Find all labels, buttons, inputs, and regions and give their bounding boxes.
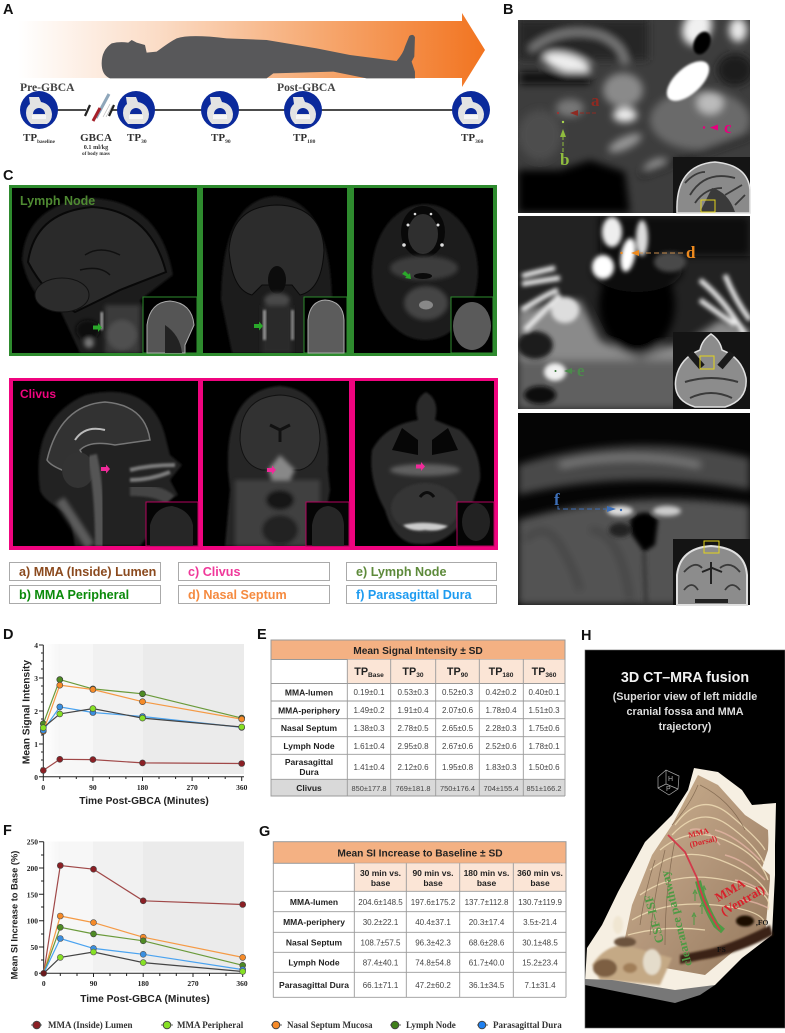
table rows: 850±177.8 bbox=[352, 784, 386, 793]
legend MMA peripheral: MMA Peripheral bbox=[177, 1020, 244, 1030]
table column headers: 360 min vs. bbox=[517, 868, 563, 878]
orange gradient arrow bbox=[18, 13, 485, 87]
table column headers: TP bbox=[532, 666, 545, 678]
white fold bbox=[762, 840, 770, 875]
table rows: 0.53±0.3 bbox=[397, 688, 429, 697]
table rows: 30.2±22.1 bbox=[363, 918, 399, 927]
x tick labels: 180 bbox=[138, 979, 149, 988]
table grid bbox=[273, 842, 566, 997]
table column headers: base bbox=[371, 878, 390, 888]
clivus row shade bbox=[271, 779, 565, 796]
label TP180: 180 bbox=[307, 139, 316, 145]
label MMA ventral: (Ventral) bbox=[718, 882, 767, 919]
MRI axial ROI d e bbox=[517, 216, 750, 409]
y tick labels: 150 bbox=[27, 890, 38, 900]
table rows: 30.1±48.5 bbox=[522, 938, 558, 948]
panel letter H: H bbox=[581, 628, 591, 644]
inset clivus sagittal bbox=[146, 502, 198, 546]
inset coronal brain bbox=[673, 539, 750, 605]
legend box e: e) Lymph Node bbox=[356, 565, 446, 579]
panel F: SI increase chart bbox=[3, 823, 248, 1005]
table rows: 0.42±0.2 bbox=[485, 688, 517, 697]
label c bbox=[703, 118, 732, 137]
legend box f bbox=[346, 586, 496, 604]
table rows: MMA-periphery bbox=[283, 917, 345, 927]
table column headers: base bbox=[530, 878, 550, 888]
table rows: 47.2±60.2 bbox=[415, 981, 451, 990]
legend box d: d) Nasal Septum bbox=[188, 588, 287, 602]
table rows: Clivus bbox=[296, 783, 322, 793]
y tick labels bbox=[27, 838, 38, 978]
panel A: study timeline bbox=[3, 2, 490, 157]
heading Post-GBCA: Post-GBCA bbox=[277, 81, 336, 94]
panel letter D: D bbox=[3, 627, 13, 643]
table rows: 1.95±0.8 bbox=[442, 763, 474, 772]
chart axes bbox=[39, 645, 244, 781]
x tick labels: 0 bbox=[42, 979, 46, 988]
table rows: 68.6±28.6 bbox=[469, 938, 505, 948]
label TP180: TP bbox=[293, 132, 307, 144]
arrow lymph coronal bbox=[254, 322, 263, 330]
panel letter A: A bbox=[3, 2, 14, 18]
heading Pre-GBCA: Pre-GBCA bbox=[20, 81, 75, 94]
arrow clivus axial bbox=[416, 462, 425, 471]
black background bbox=[585, 650, 785, 1028]
table rows: 74.8±54.8 bbox=[415, 958, 451, 968]
legend box c bbox=[178, 562, 330, 580]
panel D: mean signal intensity chart bbox=[3, 627, 248, 807]
panel C: lymph node and clivus MRI bbox=[3, 168, 498, 604]
inset clivus coronal bbox=[306, 502, 349, 546]
legend box d bbox=[178, 586, 330, 604]
subheading: trajectory) bbox=[659, 721, 712, 733]
table column headers: TP bbox=[354, 666, 368, 678]
table rows: 1.49±0.2 bbox=[353, 706, 385, 715]
x tick labels: 0 bbox=[41, 783, 45, 792]
label f bbox=[554, 490, 622, 512]
icon: orientation cube: H bbox=[668, 776, 673, 783]
series parasagittal dura bbox=[44, 936, 246, 973]
y tick labels bbox=[34, 641, 38, 782]
table rows: 36.1±34.5 bbox=[469, 981, 505, 990]
table column headers: 180 min vs. bbox=[464, 868, 509, 878]
panel letter C: C bbox=[3, 168, 14, 184]
series nasal septum bbox=[44, 913, 246, 973]
table column headers: 180 bbox=[502, 672, 514, 679]
table rows: 1.78±0.4 bbox=[485, 706, 517, 715]
table header: Mean SI Increase to Baseline ± SD bbox=[337, 848, 503, 860]
icon: MRI scanner 180 bbox=[284, 91, 322, 129]
x tick labels: 270 bbox=[187, 979, 199, 988]
panel letter G: G bbox=[259, 824, 270, 840]
inset lymph axial bbox=[451, 297, 493, 353]
axis title y: Mean Signal Intensity bbox=[22, 660, 32, 764]
label TP360: TP bbox=[461, 132, 475, 144]
label a bbox=[557, 91, 600, 116]
arrow clivus sagittal bbox=[101, 464, 110, 474]
table rows: Nasal Septum bbox=[286, 938, 343, 948]
label clearance pathway: clearance pathway bbox=[657, 868, 695, 968]
legend box e bbox=[346, 562, 496, 580]
label GBCA dose: of body mass bbox=[82, 152, 110, 157]
table rows: 2.52±0.6 bbox=[485, 742, 517, 751]
table rows: 1.41±0.4 bbox=[353, 763, 385, 772]
label TP baseline: baseline bbox=[37, 139, 56, 145]
series MMA peripheral bbox=[40, 706, 245, 731]
table rows: Nasal Septum bbox=[281, 723, 338, 733]
label e bbox=[554, 361, 585, 380]
table column headers: base bbox=[477, 878, 496, 888]
label TP30: 30 bbox=[141, 139, 147, 145]
table rows: 2.28±0.3 bbox=[485, 724, 517, 733]
table rows: MMA-lumen bbox=[290, 897, 338, 907]
inset lymph coronal bbox=[304, 297, 347, 353]
label TP90: TP bbox=[211, 132, 225, 144]
inset axial brain bbox=[673, 332, 750, 409]
inset clivus axial bbox=[457, 502, 494, 546]
axis title y: Mean SI Increase to Base (%) bbox=[10, 851, 20, 979]
label Clivus: Clivus bbox=[20, 387, 56, 401]
table rows: 1.50±0.6 bbox=[528, 763, 560, 772]
table rows: 2.78±0.5 bbox=[397, 724, 429, 733]
table rows: 20.3±17.4 bbox=[469, 918, 505, 927]
chart legend bbox=[31, 1020, 562, 1030]
CSF pathway band bbox=[698, 881, 723, 931]
label MMA dorsal: (Dorsal) bbox=[689, 834, 718, 849]
icon: MRI scanner 30 bbox=[117, 91, 155, 129]
table rows: 1.78±0.1 bbox=[528, 742, 560, 751]
series lymph node bbox=[40, 677, 245, 727]
legend nasal septum mucosa: Nasal Septum Mucosa bbox=[287, 1020, 373, 1030]
legend MMA lumen: MMA (Inside) Lumen bbox=[48, 1020, 133, 1030]
y tick labels: 4 bbox=[34, 641, 38, 650]
table rows: 2.95±0.8 bbox=[397, 742, 429, 751]
icon: MRI scanner baseline bbox=[20, 91, 58, 129]
table column headers: TP bbox=[402, 666, 416, 678]
table column headers: 360 bbox=[545, 672, 557, 679]
table rows: 40.4±37.1 bbox=[415, 918, 451, 927]
table rows: 130.7±119.9 bbox=[518, 898, 562, 907]
x tick labels: 360 bbox=[236, 979, 248, 988]
label GBCA dose: GBCA bbox=[80, 132, 112, 144]
chart axes bbox=[39, 842, 245, 977]
x tick labels: 360 bbox=[236, 783, 248, 792]
label c: c bbox=[724, 118, 732, 137]
table rows: 1.75±0.6 bbox=[528, 724, 560, 733]
MMA vessel bbox=[668, 835, 720, 930]
skull fossa 3D model bbox=[585, 768, 776, 1003]
table header bbox=[273, 842, 566, 863]
y tick labels: 0 bbox=[34, 969, 38, 978]
subheading: (Superior view of left middle bbox=[613, 691, 757, 703]
table rows: 1.91±0.4 bbox=[397, 706, 429, 715]
label f: f bbox=[554, 490, 560, 509]
table rows: 1.38±0.3 bbox=[353, 724, 385, 733]
label TP90: 90 bbox=[225, 139, 231, 145]
x tick labels: 270 bbox=[186, 783, 198, 792]
panel H: 3D CT-MRA fusion bbox=[581, 628, 785, 1028]
legend box b bbox=[10, 586, 160, 604]
label MMA dorsal: MMA bbox=[687, 826, 710, 840]
MRI clivus axial bbox=[355, 381, 494, 546]
x tick labels bbox=[42, 979, 248, 988]
label TP baseline: TP bbox=[23, 132, 37, 144]
icon: patient silhouette bbox=[102, 35, 415, 78]
label FO: ,FO bbox=[756, 918, 768, 927]
icon: MRI scanner 360 bbox=[452, 91, 490, 129]
table rows: 7.1±31.4 bbox=[524, 981, 556, 990]
subheading: cranial fossa and MMA bbox=[626, 706, 744, 718]
icon: orientation cube: P bbox=[666, 786, 671, 793]
inset lymph sagittal bbox=[143, 297, 197, 353]
table rows: Parasagittal bbox=[285, 757, 333, 767]
y tick labels: 50 bbox=[30, 943, 38, 952]
table rows: Lymph Node bbox=[288, 958, 340, 968]
y tick labels: 2 bbox=[34, 707, 38, 716]
table column headers: TP bbox=[489, 666, 502, 678]
panel E: signal intensity table bbox=[257, 627, 565, 796]
chart bands bbox=[44, 842, 244, 972]
table rows: 108.7±57.5 bbox=[361, 938, 401, 948]
table column headers bbox=[354, 863, 566, 891]
y tick labels: 200 bbox=[27, 864, 38, 873]
label TP30: TP bbox=[127, 132, 141, 144]
table rows: Dura bbox=[299, 767, 319, 777]
arrow lymph axial bbox=[402, 271, 411, 279]
axis title x: Time Post-GBCA (Minutes) bbox=[80, 994, 210, 1005]
MRI clivus sagittal bbox=[13, 381, 198, 546]
series lymph node bbox=[44, 924, 246, 973]
table rows: Parasagittal Dura bbox=[279, 980, 349, 990]
table rows: MMA-periphery bbox=[278, 706, 340, 716]
label CSF-ISF: CSF–ISF bbox=[641, 893, 667, 945]
arrow lymph sagittal bbox=[93, 323, 102, 332]
table rows: 87.4±40.1 bbox=[363, 958, 399, 968]
MRI lymph coronal bbox=[203, 188, 347, 353]
label e: e bbox=[577, 361, 585, 380]
table rows: 61.7±40.0 bbox=[469, 958, 505, 968]
MRI coronal ROI f bbox=[518, 413, 750, 605]
x tick labels: 90 bbox=[90, 979, 98, 988]
legend lymph node: Lymph Node bbox=[406, 1020, 456, 1030]
panel G: SI increase table bbox=[259, 824, 566, 997]
table rows: MMA-lumen bbox=[285, 688, 333, 698]
foramen dark groove bbox=[680, 925, 773, 964]
label b bbox=[560, 121, 569, 169]
label Lymph Node: Lymph Node bbox=[20, 194, 95, 208]
MRI sagittal ROI a b c bbox=[518, 6, 753, 213]
label a: a bbox=[591, 91, 600, 110]
table rows: 96.3±42.3 bbox=[415, 938, 451, 948]
table grid bbox=[271, 640, 565, 796]
legend box a: a) MMA (Inside) Lumen bbox=[19, 565, 156, 579]
y tick labels: 100 bbox=[27, 916, 38, 926]
table rows: Lymph Node bbox=[283, 741, 335, 751]
table rows: 704±155.4 bbox=[484, 784, 518, 793]
table rows: 0.52±0.3 bbox=[442, 688, 474, 697]
label MMA ventral: MMA bbox=[712, 876, 748, 905]
table column headers: 90 bbox=[461, 672, 468, 679]
foramen ovale bbox=[736, 916, 754, 926]
panel letter F: F bbox=[3, 823, 12, 839]
table column headers: 30 bbox=[416, 672, 424, 679]
MRI lymph axial bbox=[354, 188, 493, 353]
table column headers: 90 min vs. bbox=[412, 868, 454, 878]
panel: clivus frame bbox=[9, 378, 498, 550]
y tick labels: 1 bbox=[34, 740, 38, 749]
table rows: 769±181.8 bbox=[396, 784, 430, 793]
x tick labels bbox=[41, 783, 248, 792]
label TP360: 360 bbox=[475, 139, 484, 145]
table rows: 137.7±112.8 bbox=[465, 898, 509, 907]
label d bbox=[620, 243, 696, 262]
table rows: 15.2±23.4 bbox=[522, 958, 558, 968]
table rows: 2.07±0.6 bbox=[442, 706, 474, 715]
panel B: MRI regions of interest bbox=[503, 2, 753, 605]
table rows: 2.65±0.5 bbox=[442, 724, 474, 733]
table rows: 1.61±0.4 bbox=[353, 742, 385, 751]
y tick labels: 250 bbox=[27, 838, 38, 846]
series parasagittal dura bbox=[40, 704, 245, 733]
label b: b bbox=[560, 150, 569, 169]
table rows: 3.5±-21.4 bbox=[523, 918, 557, 927]
legend box c: c) Clivus bbox=[188, 565, 240, 579]
timeline line bbox=[40, 109, 470, 111]
chart bands bbox=[44, 644, 244, 774]
table column headers: base bbox=[423, 878, 443, 888]
legend box b: b) MMA Peripheral bbox=[19, 588, 129, 602]
table rows: 851±166.2 bbox=[527, 784, 561, 793]
series MMA lumen bbox=[44, 862, 246, 973]
MRI lymph sagittal bbox=[12, 188, 197, 353]
table rows bbox=[279, 897, 562, 990]
table rows: 204.6±148.5 bbox=[358, 898, 403, 907]
heading 3D CT-MRA fusion: 3D CT–MRA fusion bbox=[621, 670, 749, 686]
label FS: FS bbox=[717, 945, 726, 954]
table header bbox=[271, 640, 565, 660]
table rows: 2.67±0.6 bbox=[442, 742, 474, 751]
arrow clivus coronal bbox=[267, 466, 276, 474]
label GBCA dose: 0.1 ml/kg bbox=[84, 144, 109, 151]
origin marker bbox=[41, 970, 47, 976]
y tick labels: 3 bbox=[34, 674, 38, 683]
panel letter E: E bbox=[257, 627, 267, 643]
table column headers: TP bbox=[447, 666, 461, 678]
x tick labels: 90 bbox=[89, 783, 97, 792]
table column headers: Base bbox=[368, 672, 384, 679]
table rows: 197.6±175.2 bbox=[411, 898, 456, 907]
panel letter B: B bbox=[503, 2, 513, 18]
table column headers bbox=[347, 660, 565, 684]
label d: d bbox=[686, 243, 696, 262]
table header: Mean Signal Intensity ± SD bbox=[353, 646, 483, 657]
axis title x: Time Post-GBCA (Minutes) bbox=[79, 796, 209, 807]
table rows: 1.83±0.3 bbox=[485, 763, 517, 772]
x tick labels: 180 bbox=[137, 783, 148, 792]
table rows: 0.40±0.1 bbox=[528, 688, 560, 697]
series MMA lumen bbox=[40, 756, 245, 773]
series nasal septum bbox=[40, 682, 245, 734]
table column headers: 30 min vs. bbox=[360, 868, 401, 878]
y tick labels: 0 bbox=[34, 773, 38, 782]
legend box f: f) Parasagittal Dura bbox=[356, 588, 472, 602]
table rows bbox=[278, 688, 561, 793]
inset sagittal brain bbox=[673, 157, 750, 213]
table rows: 0.19±0.1 bbox=[353, 688, 385, 697]
icon: break ticks bbox=[85, 105, 114, 116]
skull base bony detail bbox=[592, 916, 672, 985]
legend parasagittal dura: Parasagittal Dura bbox=[493, 1020, 562, 1030]
panel: lymph node frame bbox=[9, 185, 497, 356]
table rows: 1.51±0.3 bbox=[528, 706, 560, 715]
green arrows bbox=[692, 886, 706, 925]
icon: orientation cube bbox=[658, 770, 679, 795]
cut edge gray bbox=[585, 979, 715, 1003]
icon: MRI scanner 90 bbox=[201, 91, 239, 129]
table rows: 2.12±0.6 bbox=[397, 763, 429, 772]
table rows: 66.1±71.1 bbox=[363, 981, 399, 990]
icon: syringe bbox=[93, 94, 112, 121]
table rows: 750±176.4 bbox=[440, 784, 475, 793]
MRI clivus coronal bbox=[203, 381, 349, 546]
series MMA peripheral bbox=[44, 949, 246, 974]
